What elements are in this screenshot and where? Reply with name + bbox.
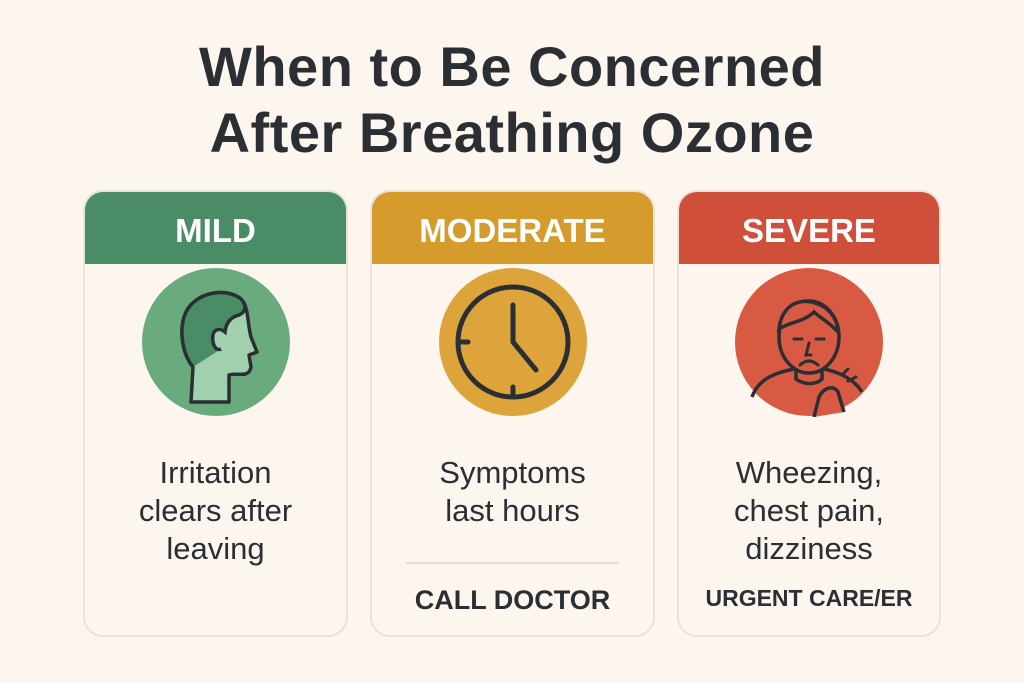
text: severe: Wheezing, bbox=[736, 455, 882, 490]
title: When to Be Concerned bbox=[199, 35, 825, 98]
heading: moderate bbox=[372, 192, 653, 264]
heading: moderate: MODERATE bbox=[419, 212, 606, 249]
text: severe: dizziness bbox=[745, 531, 873, 566]
text: moderate: last hours bbox=[445, 493, 580, 528]
panel: severe bbox=[677, 190, 941, 637]
text: mild bbox=[139, 455, 292, 566]
heading: severe: SEVERE bbox=[742, 212, 876, 249]
heading: mild bbox=[85, 192, 346, 264]
panel: mild bbox=[83, 190, 348, 637]
footer: call doctor: CALL DOCTOR bbox=[415, 585, 610, 615]
icon: clock bbox=[439, 268, 587, 416]
panel: moderate bbox=[370, 190, 655, 637]
text: severe: chest pain, bbox=[734, 493, 884, 528]
text: mild: leaving bbox=[166, 531, 265, 566]
text: severe bbox=[734, 455, 884, 566]
title: After Breathing Ozone bbox=[210, 101, 814, 164]
text: moderate: Symptoms bbox=[439, 455, 586, 490]
footer: urgent care: URGENT CARE/ER bbox=[705, 585, 912, 611]
title bbox=[199, 35, 825, 164]
heading: severe bbox=[679, 192, 939, 264]
icon: person in pain bbox=[735, 268, 883, 417]
text: mild: clears after bbox=[139, 493, 292, 528]
text: moderate bbox=[439, 455, 586, 528]
icon: head profile bbox=[142, 268, 290, 416]
heading: mild: MILD bbox=[175, 212, 256, 249]
text: mild: Irritation bbox=[160, 455, 271, 490]
